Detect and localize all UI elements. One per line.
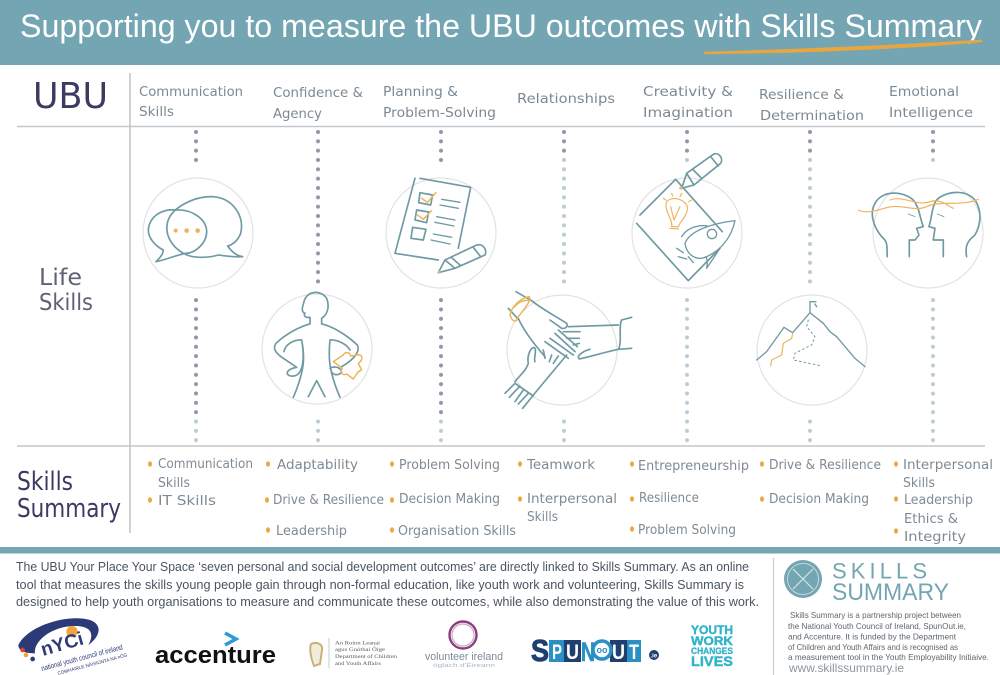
column headings: Imagination: [643, 105, 733, 121]
partnership description: the National Youth Council of Ireland, SpunOut.ie,: [788, 622, 966, 631]
column headings: Creativity &: [643, 84, 734, 100]
icon: mountain with flag: [757, 295, 867, 405]
logo: accenture: accenture: [155, 642, 276, 669]
partnership description: and Accenture. It is funded by the Department: [788, 632, 957, 642]
column headings: [139, 84, 973, 124]
table grid lines: [17, 73, 985, 533]
column headings: Resilience &: [759, 87, 844, 103]
icon: three joined hands: [505, 292, 632, 408]
logo: SpunOut: T: [629, 641, 639, 664]
column headings: Relationships: [517, 91, 615, 107]
column headings: Confidence &: [273, 85, 363, 101]
footer band: [0, 547, 1000, 554]
logo: SpunOut: S: [531, 633, 549, 668]
column headings: Agency: [273, 106, 322, 122]
skills list: Ethics &: [904, 512, 958, 527]
partnership description: Skills Summary is a partnership project between: [790, 611, 961, 620]
partnership description: of Children and Youth Affairs and is recognised as: [788, 643, 958, 652]
column headings: Intelligence: [889, 105, 973, 121]
row heading: Life Skills: Skills: [39, 290, 93, 316]
skills list: Integrity: [904, 530, 966, 545]
skills list: IT Skills: [158, 494, 216, 509]
logo: Youth Work Changes Lives: YOUTH: [691, 623, 733, 637]
footer divider: [772, 558, 774, 675]
column headings: Determination: [760, 108, 864, 124]
skills list: Problem Solving: [638, 523, 736, 538]
logo: Department of Children and Youth Affairs: Department of Children: [335, 655, 398, 660]
skills list: Teamwork: [526, 458, 595, 473]
logo: SpunOut: [531, 633, 659, 668]
skills list: Interpersonal: [903, 458, 993, 473]
logo: SpunOut: P: [552, 641, 562, 664]
logo: Youth Work Changes Lives: WORK: [691, 634, 733, 648]
row heading: Skills Summary: Summary: [17, 494, 121, 524]
skills list: Leadership: [904, 493, 973, 508]
logo: NYCI: national youth council of ireland: [40, 642, 124, 673]
logo: SpunOut: N: [581, 637, 595, 667]
title: Supporting you to measure the UBU outcomes with Skills Summary: [20, 8, 982, 44]
footer description text: designed to help youth organisations to measure and communicate these outcomes, while also demonstrating the value of this work.: [16, 595, 759, 609]
logo: SpunOut: oo: [596, 645, 608, 655]
column headings: Skills: [139, 104, 174, 120]
icon: speech bubbles: [143, 178, 253, 288]
skills list: Decision Making: [769, 492, 869, 507]
skills list: Skills: [903, 476, 935, 491]
column headings: Problem-Solving: [383, 105, 496, 121]
dotted connectors: [193, 130, 936, 444]
skills list: Entrepreneurship: [638, 459, 749, 474]
row heading: Skills Summary: Skills: [17, 467, 73, 497]
skills list: Leadership: [276, 524, 347, 539]
logo: Department of Children and Youth Affairs: [310, 638, 398, 668]
row heading: Skills Summary: [17, 467, 121, 524]
skills list: Communication: [158, 457, 253, 472]
skills list: Drive & Resilience: [273, 493, 384, 508]
skills list: Skills: [158, 476, 190, 491]
row heading: Life Skills: [39, 265, 93, 316]
icon: checklist and pencil: [386, 178, 496, 288]
row heading: UBU: UBU: [33, 76, 108, 117]
logo: Volunteer Ireland: [425, 622, 503, 669]
footer description text: The UBU Your Place Your Space ‘seven personal and social development outcomes’ are directly linked to Skills Summary. As an online: [16, 560, 749, 574]
logo: Youth Work Changes Lives: [691, 623, 733, 669]
logo: Youth Work Changes Lives: CHANGES: [691, 646, 733, 657]
footer description text: tool that measures the skills young people gain through non-formal education, like youth work and volunteering, Skills Summary is: [16, 578, 744, 592]
website address: www.skillssummary.ie: [788, 661, 904, 675]
logo: Department of Children and Youth Affairs: An Roinn Leanaí: [335, 642, 381, 646]
skills list: Skills: [527, 510, 558, 525]
logo: Department of Children and Youth Affairs: and Youth Affairs: [335, 662, 381, 667]
logo: NYCI: nYCi: [39, 629, 86, 661]
title underline swoosh: [705, 41, 981, 53]
logo: SpunOut: .ie: [650, 654, 658, 660]
column headings: Emotional: [889, 84, 959, 100]
skills list: Resilience: [639, 491, 699, 506]
row heading: Life Skills: Life: [39, 265, 82, 291]
header banner: [0, 0, 1000, 65]
skills list: Decision Making: [399, 492, 500, 507]
skills list: [148, 457, 993, 545]
skills list: Adaptability: [277, 458, 358, 473]
logo: SpunOut: U: [566, 641, 579, 664]
footer description text: [16, 560, 759, 609]
logo: SpunOut: U: [612, 641, 625, 664]
logo: Skills Summary badge: SUMMARY: [832, 579, 949, 606]
column headings: Planning &: [383, 84, 458, 100]
icon: person with puzzle piece: [262, 292, 372, 404]
logo: Volunteer Ireland: volunteer ireland: [425, 651, 503, 663]
logo: Volunteer Ireland: óglach d'Éireann: [433, 662, 495, 669]
logo: Youth Work Changes Lives: LIVES: [691, 653, 733, 669]
partnership description: [788, 611, 989, 662]
skills list: Drive & Resilience: [769, 458, 881, 473]
logo: Department of Children and Youth Affairs: agus Gnóthaí Óige: [335, 647, 385, 653]
logo: Skills Summary badge: [784, 558, 949, 606]
logo: Skills Summary badge: SKILLS: [832, 558, 927, 584]
icon: two facing heads: [858, 178, 983, 288]
column headings: Communication: [139, 84, 243, 100]
logo: NYCI: [18, 618, 128, 675]
skills list: Problem Solving: [399, 458, 500, 473]
partnership description: a measurement tool in the Youth Employability Initiaive.: [788, 653, 989, 662]
skills list: Organisation Skills: [398, 524, 516, 539]
skills list: Interpersonal: [527, 492, 617, 507]
icon: paper with lightbulb and rocket: [632, 154, 742, 288]
